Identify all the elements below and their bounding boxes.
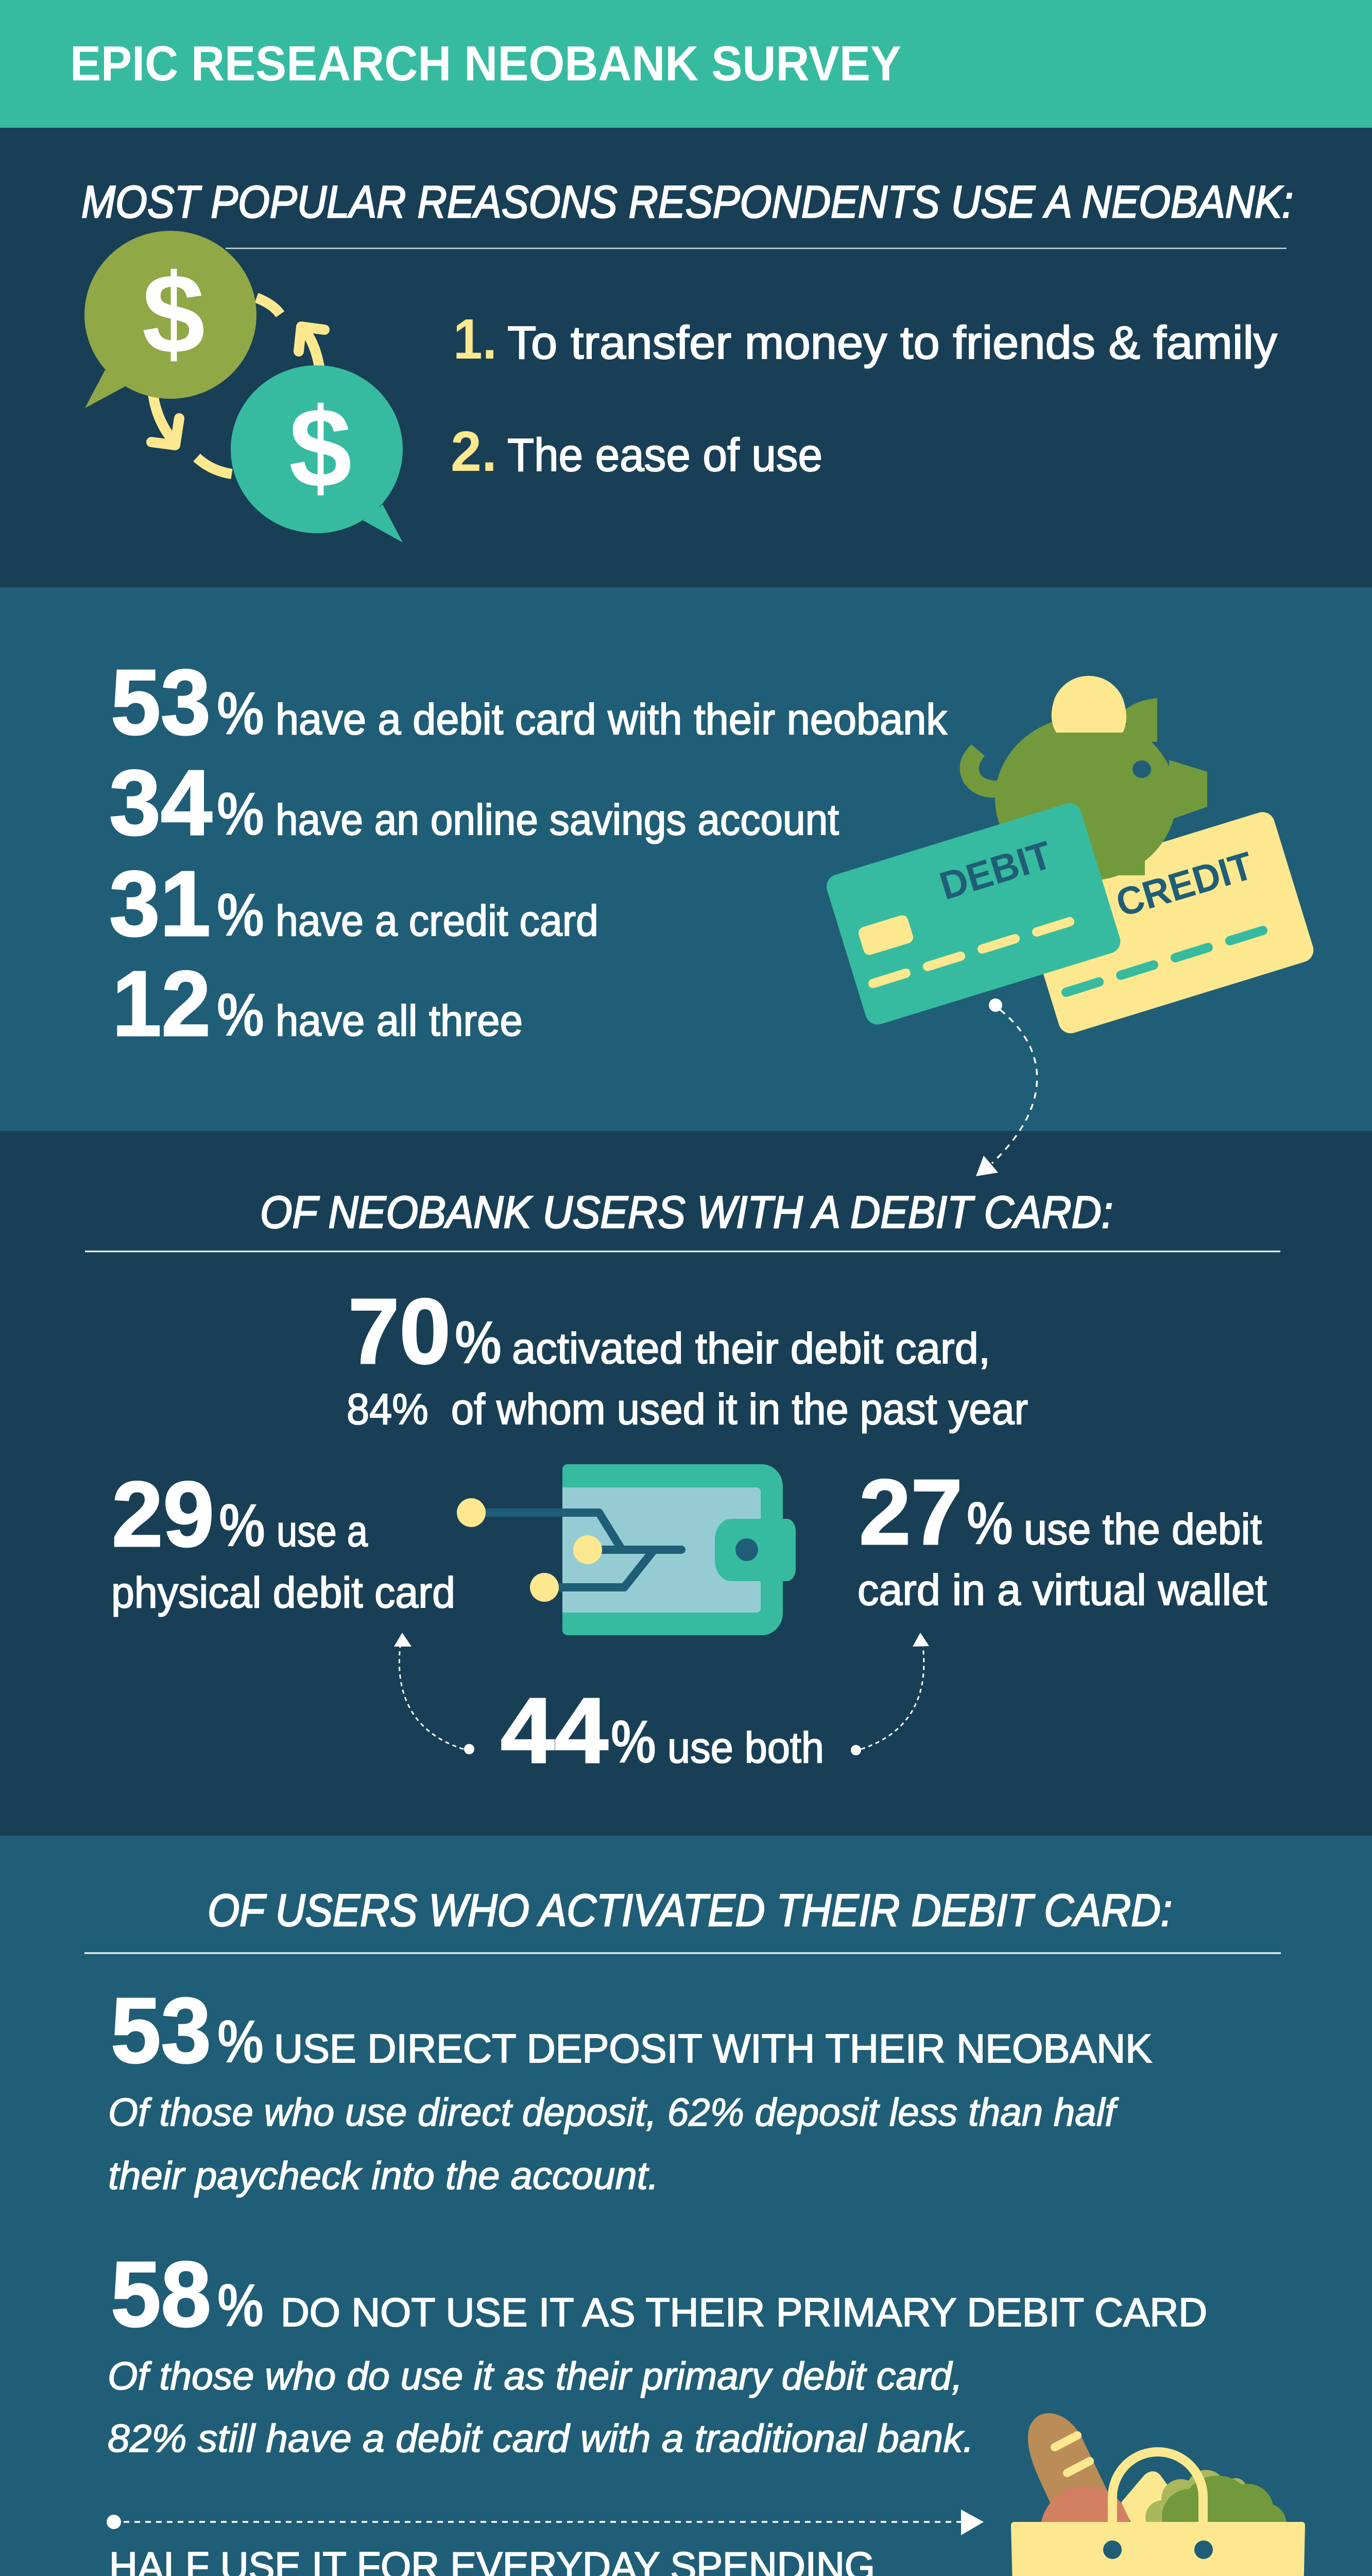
stat: 58% not primary: Of those who do use it as their primary debit card,: [108, 2354, 963, 2398]
stat: 29% physical: 29: [112, 1463, 214, 1566]
header panel: [0, 0, 1372, 128]
stat: 53% direct deposit: their paycheck into the account.: [108, 2154, 659, 2198]
stat: 29% physical: use a: [277, 1507, 368, 1555]
icon: money transfer speech bubbles: [84, 231, 403, 543]
heading: debit card users: OF NEOBANK USERS WITH A DEBIT CARD:: [260, 1187, 1113, 1238]
stat: 34% online savings: %: [217, 780, 264, 848]
stat: 31% credit card: have a credit card: [276, 896, 598, 945]
stat: 70% activated: [347, 1280, 1028, 1433]
stat: 29% physical: physical debit card: [111, 1568, 455, 1617]
panel: users with a debit card: [0, 1131, 1372, 1836]
stat: 12% all three: 12: [112, 952, 211, 1056]
stat: 27% virtual wallet: card in a virtual wallet: [858, 1566, 1267, 1614]
stat: 53% debit card: 53: [111, 651, 211, 754]
arrow: both to physical: [394, 1633, 474, 1754]
stat: 53% debit card: [111, 651, 948, 754]
stat: 31% credit card: [109, 852, 598, 956]
stat: 31% credit card: %: [217, 881, 264, 949]
reason 1: 1.: [453, 308, 497, 371]
icon: money transfer speech bubbles: $: [142, 250, 205, 377]
reason 2: [451, 420, 822, 483]
stat: 53% direct deposit: [108, 1979, 1152, 2198]
icon: money transfer speech bubbles: $: [289, 384, 352, 511]
arrow: debit card to section: [976, 998, 1037, 1176]
stat: 53% direct deposit: USE DIRECT DEPOSIT WITH THEIR NEOBANK: [274, 2026, 1152, 2071]
stat: 27% virtual wallet: %: [967, 1489, 1013, 1557]
icon: grocery bag: [1011, 2413, 1305, 2576]
stat: 58% not primary: %: [217, 2272, 264, 2340]
heading: activated users: OF USERS WHO ACTIVATED THEIR DEBIT CARD:: [208, 1885, 1172, 1936]
stat: 29% physical: [111, 1463, 455, 1617]
icon: piggy bank: [960, 676, 1207, 881]
arrow: to shopping bag: [107, 2510, 984, 2535]
stat: 53% direct deposit: 53: [111, 1979, 211, 2082]
stat: 58% not primary: [108, 2243, 1207, 2461]
icon: debit card: [824, 800, 1123, 1028]
stat: 34% online savings: [109, 751, 839, 855]
stat: 70% activated: %: [455, 1309, 502, 1377]
stat: 12% all three: [112, 952, 523, 1056]
stat: 27% virtual wallet: use the debit: [1024, 1505, 1262, 1553]
stat: 34% online savings: have an online savings account: [276, 795, 839, 844]
reason 1: To transfer money to friends & family: [507, 317, 1277, 369]
stat: 27% virtual wallet: 27: [859, 1461, 963, 1564]
arrow: both to virtual wallet: [851, 1633, 929, 1755]
stat: 70% activated: activated their debit card,: [512, 1324, 990, 1372]
stat: 44% both: use both: [667, 1723, 824, 1772]
icon: debit card: DEBIT: [935, 833, 1057, 908]
stat: 53% direct deposit: %: [217, 2008, 264, 2076]
stat: 44% both: %: [611, 1708, 656, 1776]
icon: credit card: [1017, 809, 1316, 1037]
stat: 44% both: 44: [501, 1679, 608, 1783]
panel: most popular reasons: [0, 128, 1372, 587]
stat: 58% not primary: 82% still have a debit card with a traditional bank.: [108, 2417, 974, 2461]
stat: 70% activated: 70: [348, 1280, 451, 1383]
stat: 53% debit card: have a debit card with their neobank: [276, 695, 948, 743]
stat: 58% not primary: DO NOT USE IT AS THEIR PRIMARY DEBIT CARD: [281, 2290, 1207, 2335]
panel: product ownership: [0, 587, 1372, 1131]
icon: credit card: CREDIT: [1111, 844, 1258, 925]
stat: 12% all three: %: [217, 981, 264, 1049]
stat: 27% virtual wallet: [858, 1461, 1267, 1614]
reason 2: The ease of use: [507, 430, 822, 481]
stat: 53% debit card: %: [217, 680, 264, 748]
panel: users who activated: [0, 1836, 1372, 2576]
stat: 31% credit card: 31: [109, 852, 211, 956]
stat: 44% both: [501, 1679, 824, 1783]
stat: 12% all three: have all three: [276, 996, 523, 1045]
stat: 53% direct deposit: Of those who use direct deposit, 62% deposit less than half: [108, 2091, 1119, 2134]
stat: 70% activated: 84% of whom used it in the past year: [347, 1385, 1028, 1433]
stat: 29% physical: %: [219, 1492, 265, 1560]
stat: 58% not primary: 58: [111, 2243, 211, 2346]
stat: 34% online savings: 34: [109, 751, 212, 855]
title: EPIC RESEARCH NEOBANK SURVEY: [70, 36, 901, 91]
reason 2: 2.: [451, 420, 497, 483]
icon: wallet: [457, 1464, 796, 1635]
